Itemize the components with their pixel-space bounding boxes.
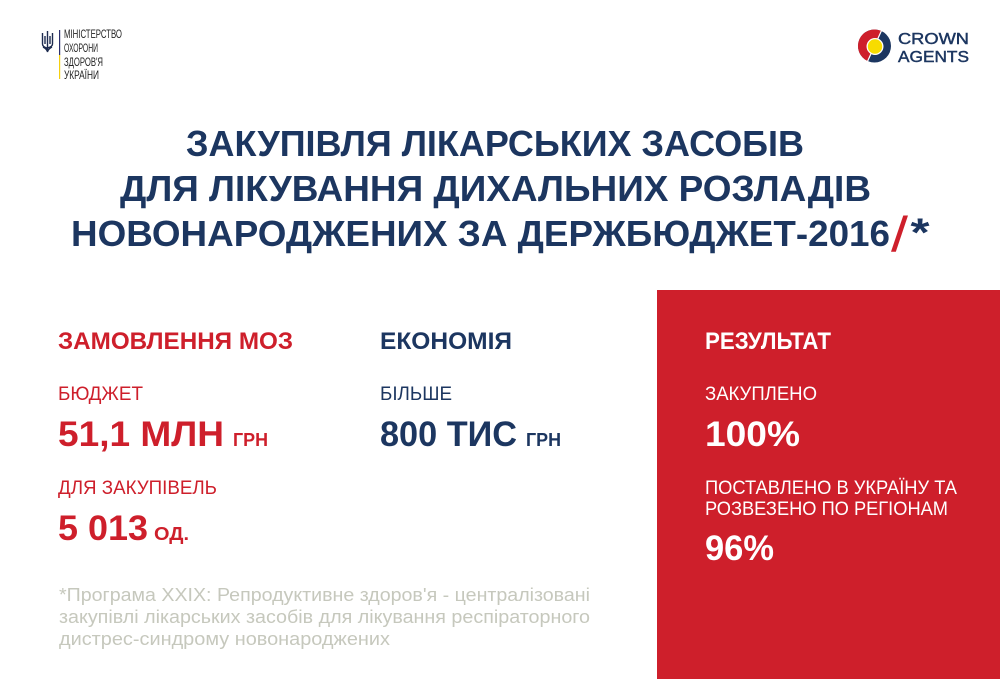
label: more than: БІЛЬШЕ [380, 384, 452, 405]
title: НОВОНАРОДЖЕНИХ ЗА ДЕРЖБЮДЖЕТ-2016 [71, 213, 890, 254]
title: ДЛЯ ЛІКУВАННЯ ДИХАЛЬНИХ РОЗЛАДІВ [120, 168, 871, 209]
heading: order: ЗАМОВЛЕННЯ МОЗ [58, 328, 293, 355]
icon: trident [42, 31, 52, 52]
logo: Ministry of Health: ОХОРОНИ [64, 41, 98, 55]
title: ЗАКУПІВЛЯ ЛІКАРСЬКИХ ЗАСОБІВ [186, 123, 804, 164]
footnote: закупівлі лікарських засобів для лікування респіраторного [59, 607, 590, 627]
label: budget: БЮДЖЕТ [58, 384, 143, 405]
footnote [59, 585, 590, 649]
stat: units [58, 509, 189, 548]
logo: Crown Agents [858, 29, 969, 66]
logo: Ministry of Health: ЗДОРОВ'Я [64, 55, 103, 69]
stat: savings value: 800 ТИС [380, 415, 517, 454]
stat: delivered value: 96% [705, 529, 774, 568]
logo: Crown Agents: AGENTS [898, 49, 969, 66]
label: delivered: РОЗВЕЗЕНО ПО РЕГІОНАМ [705, 499, 948, 520]
panel: ministry order [58, 328, 293, 548]
logo: Ministry of Health [42, 27, 122, 82]
stat: budget value: 51,1 МЛН [58, 415, 224, 454]
title: / [891, 208, 908, 262]
title [71, 123, 930, 262]
label: delivered: ПОСТАВЛЕНО В УКРАЇНУ ТА [705, 478, 957, 499]
label: delivered [705, 478, 957, 520]
logo: Ministry of Health: МІНІСТЕРСТВО [64, 27, 122, 41]
heading: savings: ЕКОНОМІЯ [380, 328, 512, 355]
stat: budget value: ГРН [233, 430, 268, 450]
footnote: *Програма XXIX: Репродуктивне здоров'я - централізовані [59, 585, 590, 605]
logo: Ministry of Health: УКРАЇНИ [64, 68, 99, 82]
stat: units: 5 013 [58, 509, 148, 548]
stat: savings value: ГРН [526, 430, 561, 450]
logo: Crown Agents: CROWN [898, 31, 969, 48]
icon: crown agents roundel [858, 29, 891, 62]
footnote: дистрес-синдрому новонароджених [59, 629, 390, 649]
stat: units: ОД. [154, 524, 189, 544]
label: for procurement: ДЛЯ ЗАКУПІВЕЛЬ [58, 478, 217, 499]
label: purchased: ЗАКУПЛЕНО [705, 384, 817, 405]
panel: savings [380, 328, 561, 454]
heading: result: РЕЗУЛЬТАТ [705, 328, 831, 355]
panel: result [657, 290, 1000, 679]
title: * [910, 211, 930, 255]
stat: purchased value: 100% [705, 415, 800, 454]
